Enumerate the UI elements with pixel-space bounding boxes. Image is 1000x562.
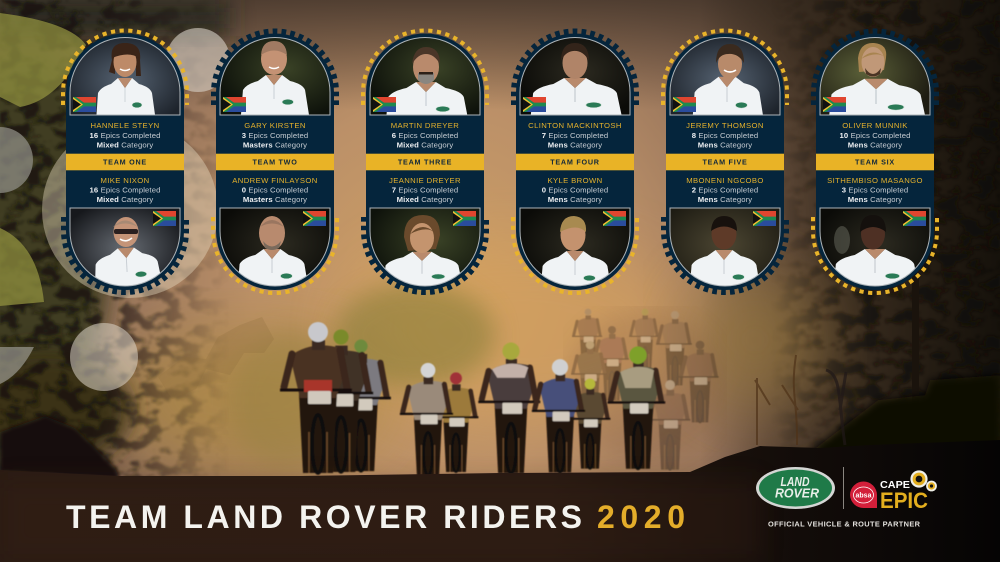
ground xyxy=(0,440,1000,562)
portrait: Sithembiso Masango xyxy=(820,208,930,293)
rider details: Jeannie Dreyer: JEANNIE DREYER xyxy=(389,176,461,185)
logo: Cape Epic: EPIC xyxy=(880,488,928,513)
rider details: Mike Nixon xyxy=(90,176,160,204)
rider details: Oliver Munnik: Mens Category xyxy=(848,140,902,150)
rider details: Jeannie Dreyer xyxy=(389,176,461,204)
rider details: Oliver Munnik: 10 Epics Completed xyxy=(840,131,910,140)
rider 4 xyxy=(400,363,453,475)
rider details: Hannele Steyn: HANNELE STEYN xyxy=(90,121,160,130)
rider details: Clinton Mackintosh: CLINTON MACKINTOSH xyxy=(528,121,622,130)
right trees xyxy=(780,0,1000,448)
rider 1 xyxy=(280,322,352,473)
portrait: Mboneni Ngcobo xyxy=(670,208,780,294)
portrait: Jeannie Dreyer xyxy=(370,208,480,292)
rider details: Clinton Mackintosh: Mens Category xyxy=(548,140,602,150)
portrait: Jeremy Thomson xyxy=(670,37,780,123)
rider details: Sithembiso Masango: 3 Epics Completed xyxy=(842,186,908,194)
team label: TEAM TWO xyxy=(252,158,298,167)
rider details: Mboneni Ngcobo: Mens Category xyxy=(698,195,752,204)
rider details: Kyle Brown xyxy=(542,176,608,204)
team four card xyxy=(513,33,637,295)
rider details: Jeremy Thomson xyxy=(686,121,764,150)
left trees xyxy=(0,0,240,480)
foreground cyclists xyxy=(280,322,665,475)
rider details: Kyle Brown: 0 Epics Completed xyxy=(542,186,608,194)
rider details: Mike Nixon: MIKE NIXON xyxy=(100,176,150,185)
rider 3 xyxy=(328,340,391,471)
title: TEAM LAND ROVER RIDERS xyxy=(66,499,582,535)
rider details: Jeannie Dreyer: Mixed Category xyxy=(397,195,453,204)
rider details: Hannele Steyn: 16 Epics Completed xyxy=(90,131,160,140)
rider details: Sithembiso Masango xyxy=(827,176,923,204)
rider details: Kyle Brown: KYLE BROWN xyxy=(547,176,603,185)
portrait: Gary Kirsten xyxy=(220,37,330,119)
rider details: Clinton Mackintosh: 7 Epics Completed xyxy=(542,131,608,140)
rider details: Martin Dreyer: Mixed Category xyxy=(397,140,453,150)
rider details: Martin Dreyer xyxy=(391,121,459,150)
portrait: Kyle Brown xyxy=(520,208,630,295)
rider details: Andrew Finlayson: Masters Category xyxy=(243,195,307,204)
rider details: Clinton Mackintosh xyxy=(528,121,622,150)
team five card xyxy=(663,30,787,294)
team one card xyxy=(63,30,187,294)
rider details: Jeremy Thomson: JEREMY THOMSON xyxy=(686,121,764,130)
rider details: Andrew Finlayson: 0 Epics Completed xyxy=(242,186,308,194)
rider details: Oliver Munnik xyxy=(840,121,910,150)
logo: Absa: absa xyxy=(856,492,872,500)
rider 2 xyxy=(305,329,373,472)
rider details: Gary Kirsten: Masters Category xyxy=(243,140,307,150)
logo: Land Rover xyxy=(756,467,835,509)
rider details: Sithembiso Masango: Mens Category xyxy=(848,195,902,204)
background cyclists xyxy=(565,309,725,470)
rider details: Sithembiso Masango: SITHEMBISO MASANGO xyxy=(827,176,923,185)
rider 8 xyxy=(567,379,610,469)
decorative translucent circles and gears xyxy=(0,13,274,399)
rider details: Andrew Finlayson xyxy=(232,176,318,204)
team label: TEAM SIX xyxy=(855,158,895,167)
rider 6 xyxy=(478,343,540,473)
portrait: Mike Nixon xyxy=(70,208,180,294)
rider details: Mboneni Ngcobo: MBONENI NGCOBO xyxy=(686,176,764,185)
rider 7 xyxy=(532,359,585,472)
rider details: Martin Dreyer: MARTIN DREYER xyxy=(391,121,459,130)
rider details: Mike Nixon: Mixed Category xyxy=(97,195,153,204)
title year: 2020 xyxy=(597,499,685,535)
portrait: Martin Dreyer xyxy=(370,37,480,116)
rider details: Jeremy Thomson: Mens Category xyxy=(698,140,752,150)
team label: TEAM ONE xyxy=(103,158,147,167)
logo: Cape Epic xyxy=(880,472,936,513)
portrait: Oliver Munnik xyxy=(820,37,930,125)
team label: TEAM FOUR xyxy=(550,158,600,167)
portrait: Hannele Steyn xyxy=(70,37,180,122)
rider details: Mboneni Ngcobo xyxy=(686,176,764,204)
logo: Land Rover: LAND xyxy=(780,475,810,489)
rider details: Gary Kirsten xyxy=(242,121,308,150)
logo: Absa xyxy=(850,482,877,508)
logo: Land Rover: ROVER xyxy=(775,486,819,500)
team label: TEAM THREE xyxy=(398,158,452,167)
rider details: Jeannie Dreyer: 7 Epics Completed xyxy=(392,186,458,194)
rider details: Hannele Steyn: Mixed Category xyxy=(97,140,153,150)
rider details: Mboneni Ngcobo: 2 Epics Completed xyxy=(692,186,758,194)
rider details: Jeremy Thomson: 8 Epics Completed xyxy=(692,131,758,140)
partner caption: OFFICIAL VEHICLE & ROUTE PARTNER xyxy=(768,520,921,528)
rider 9 xyxy=(608,346,665,469)
team two card xyxy=(213,33,337,293)
rider details: Hannele Steyn xyxy=(90,121,160,150)
rider details: Mike Nixon: 16 Epics Completed xyxy=(90,186,160,194)
team label: TEAM FIVE xyxy=(702,158,748,167)
rider details: Martin Dreyer: 6 Epics Completed xyxy=(392,131,458,140)
rider 5 xyxy=(431,372,478,472)
rider details: Gary Kirsten: 3 Epics Completed xyxy=(242,131,308,140)
logo: Cape Epic: CAPE xyxy=(880,479,910,491)
rider details: Kyle Brown: Mens Category xyxy=(548,195,602,204)
portrait: Clinton Mackintosh xyxy=(520,37,630,122)
team three card xyxy=(363,30,487,292)
divider xyxy=(843,467,844,509)
team six card xyxy=(813,33,937,293)
small roadside bushes xyxy=(755,355,846,445)
portrait: Andrew Finlayson xyxy=(220,208,330,293)
rider details: Andrew Finlayson: ANDREW FINLAYSON xyxy=(232,176,318,185)
rider details: Gary Kirsten: GARY KIRSTEN xyxy=(244,121,306,130)
rider details: Oliver Munnik: OLIVER MUNNIK xyxy=(842,121,908,130)
